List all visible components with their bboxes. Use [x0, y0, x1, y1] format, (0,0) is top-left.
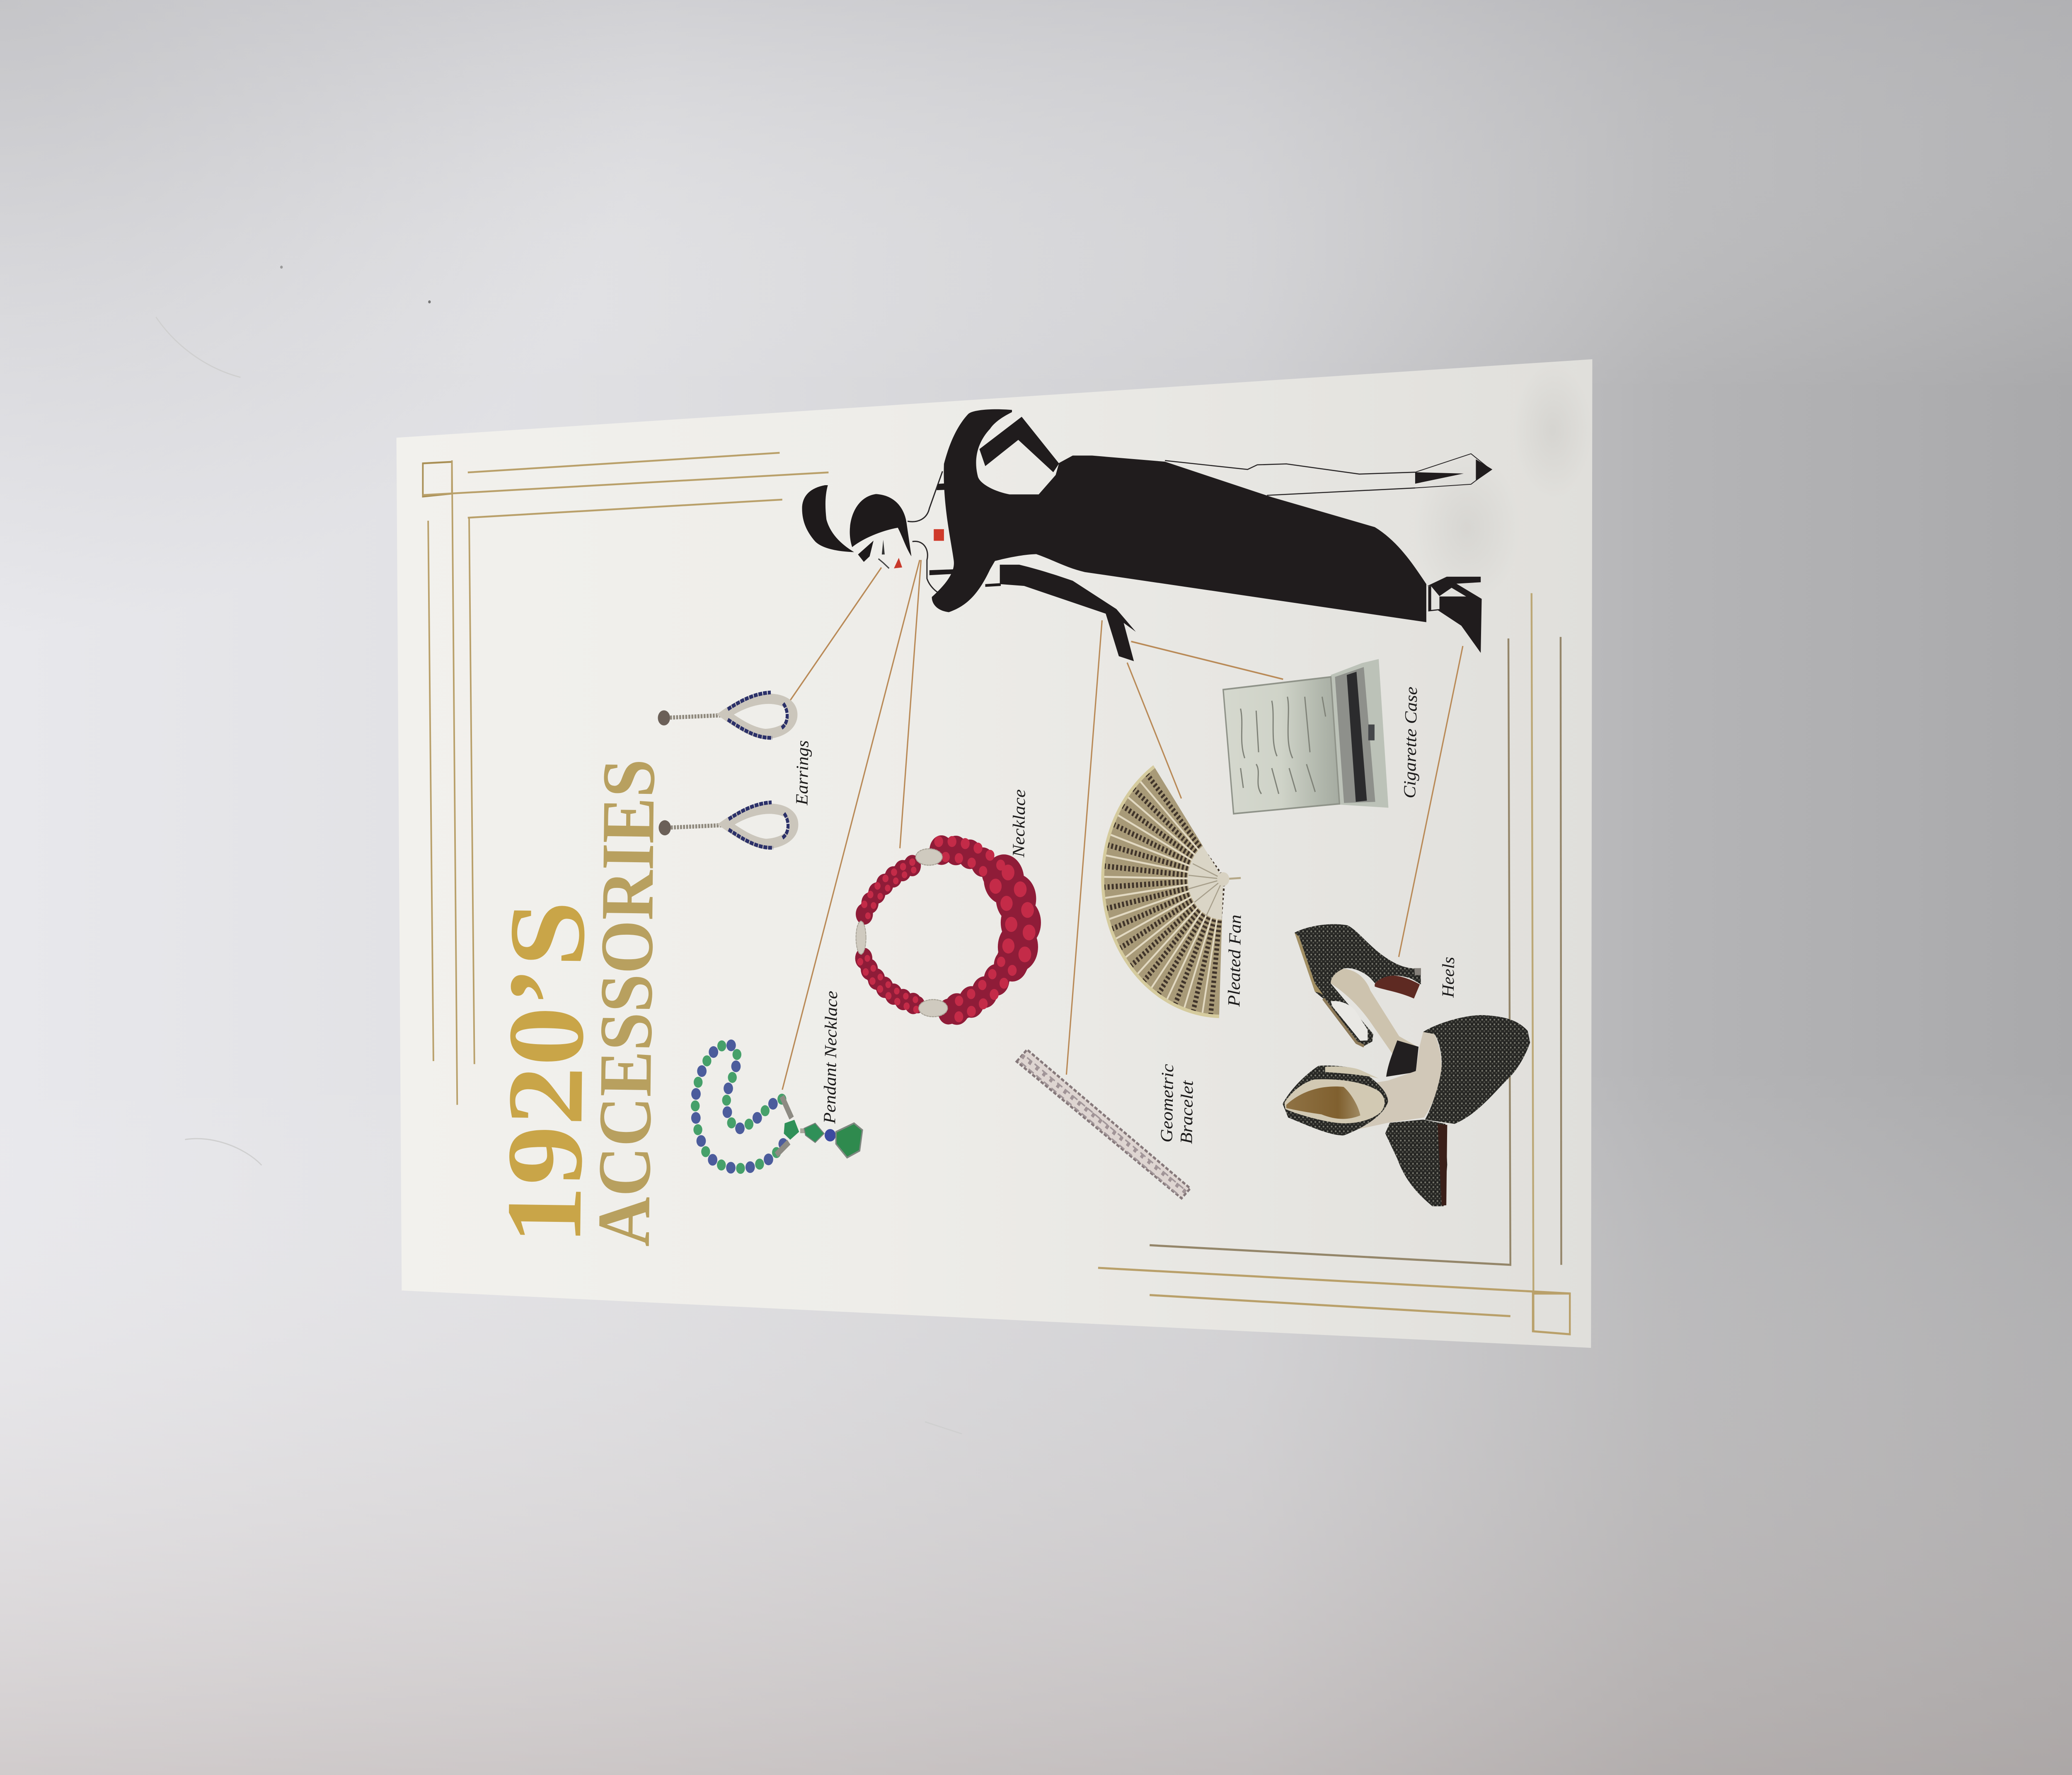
label: Necklace: Necklace — [1009, 789, 1029, 858]
title: 1920'S: 1920’S — [484, 900, 608, 1245]
heels — [1283, 924, 1530, 1206]
label: Geometric Bracelet — [1157, 1064, 1197, 1144]
lowered arm and glove — [1000, 565, 1136, 661]
lower shoe — [1427, 577, 1482, 653]
raised shoe — [1415, 454, 1492, 488]
pendant necklace — [695, 1044, 862, 1168]
earring lower — [658, 803, 794, 848]
cloche hat — [850, 494, 911, 556]
ruby necklace — [856, 841, 1029, 1020]
hat brim — [802, 485, 854, 552]
geometric bracelet — [1017, 1050, 1190, 1198]
upper shoe — [1295, 924, 1421, 1077]
stockinged leg outline — [1165, 461, 1415, 495]
earring upper — [658, 692, 793, 738]
gold art deco frame: bottom right — [1098, 593, 1570, 1334]
gold art deco frame: top left — [423, 453, 828, 1105]
lower shoe — [1283, 1015, 1530, 1206]
label: Pendant Necklace: Pendant Necklace — [820, 991, 841, 1124]
shoulder strips — [929, 483, 1001, 587]
dress and coat — [932, 409, 1426, 622]
pleated fan — [1103, 767, 1241, 1016]
label: Cigarette Case: Cigarette Case — [1400, 687, 1421, 798]
title: ACCESSORIES: ACCESSORIES — [582, 758, 670, 1247]
cigarette case — [1223, 659, 1388, 814]
flapper figure — [802, 409, 1492, 661]
printed card — [397, 359, 1592, 1348]
label: Geometric Bracelet: Bracelet — [1176, 1080, 1197, 1144]
label: Pleated Fan: Pleated Fan — [1224, 914, 1245, 1007]
earrings and necklaces — [658, 692, 1029, 1168]
label: Geometric Bracelet: Geometric — [1157, 1064, 1177, 1143]
face details — [858, 471, 944, 594]
raised arm — [979, 417, 1059, 472]
bracelet, fan and cigarette case — [1017, 659, 1388, 1198]
label: Heels: Heels — [1438, 957, 1458, 998]
label: Earrings: Earrings — [792, 740, 812, 806]
connector lines — [782, 560, 1463, 1090]
